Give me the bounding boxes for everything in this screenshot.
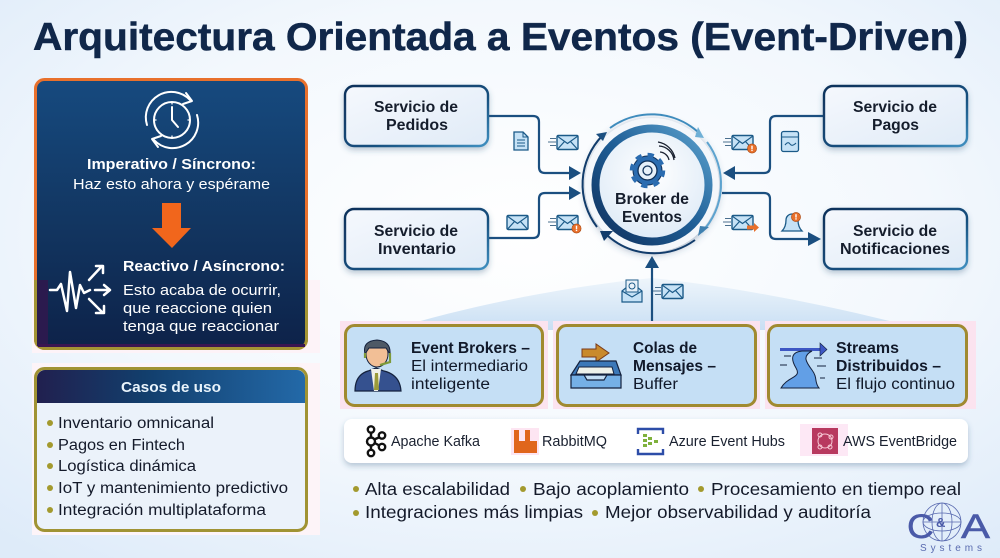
background wedge behind cards <box>390 278 925 330</box>
list: use cases: Integración multiplataforma <box>58 502 266 519</box>
logo: c&a systems: A <box>961 508 990 546</box>
panel: paradigm shift <box>32 80 320 353</box>
text: colas de mensajes <box>633 340 716 393</box>
label: broker de eventos: Eventos <box>622 209 682 226</box>
box: servicio de inventario: Inventario <box>378 241 456 258</box>
text: streams distribuidos <box>836 340 955 393</box>
icon: fast envelope bottom <box>653 284 683 298</box>
benefits list: Bajo acoplamiento <box>533 479 689 499</box>
logo: rabbitmq <box>511 428 607 455</box>
title: Arquitectura Orientada a Eventos (Event-Driven) <box>33 16 968 59</box>
logo: apache kafka <box>367 426 481 456</box>
text: reactivo description: tenga que reaccionar <box>123 318 279 335</box>
icon: pulse with arrows <box>50 266 110 313</box>
icon: envelope <box>507 216 528 230</box>
box: servicio de inventario: Servicio de <box>374 223 458 240</box>
logo: aws eventbridge <box>800 424 957 456</box>
box: servicio de pagos: Servicio de <box>853 99 937 116</box>
text: colas de mensajes: Mensajes – <box>633 358 716 375</box>
heading: imperativo: Imperativo / Síncrono: <box>87 156 256 173</box>
logo: c&a systems: & <box>936 515 945 530</box>
cycle arrows <box>583 114 721 253</box>
connector: pagos to broker <box>723 116 823 180</box>
heading: casos de uso: Casos de uso <box>121 379 221 396</box>
logo: c&a systems: Systems <box>920 543 982 554</box>
icon: envelope forward <box>723 216 759 232</box>
panel header <box>37 370 305 403</box>
box: servicio de notificaciones: Notificaciones <box>840 241 950 258</box>
benefits list: Mejor observabilidad y auditoría <box>605 502 871 522</box>
icon: payment receipt <box>782 132 798 152</box>
logo: c&a systems <box>907 503 990 554</box>
box: servicio de inventario <box>345 209 488 269</box>
icon: bell <box>782 212 802 231</box>
text: event brokers: El intermediario <box>411 358 528 375</box>
text: event brokers <box>411 340 530 393</box>
logo: azure event hubs <box>638 429 785 454</box>
icon: envelope alert <box>548 216 581 233</box>
arrow: orange down <box>152 203 191 248</box>
benefits list: Procesamiento en tiempo real <box>711 479 961 499</box>
list: use cases: IoT y mantenimiento predictivo <box>58 480 288 497</box>
text: streams distribuidos: El flujo continuo <box>836 376 955 393</box>
broker hub <box>583 114 721 253</box>
icon: stream river <box>780 343 827 388</box>
box: servicio de pedidos: Servicio de <box>374 99 458 116</box>
icon: inbox tray <box>571 344 621 388</box>
box: servicio de pagos <box>824 86 967 146</box>
text: reactivo description <box>123 282 281 335</box>
benefits list: Alta escalabilidad <box>365 479 510 499</box>
card: event brokers <box>340 321 548 409</box>
card: colas de mensajes <box>553 321 760 409</box>
text: reactivo description: Esto acaba de ocurrir, <box>123 282 281 299</box>
list: use cases: Pagos en Fintech <box>58 437 185 454</box>
box: servicio de notificaciones: Servicio de <box>853 223 937 240</box>
technology logo bar <box>344 419 968 463</box>
logo: aws eventbridge: AWS EventBridge <box>843 434 957 450</box>
box: servicio de pedidos: Pedidos <box>386 117 448 134</box>
connector: broker to notificaciones <box>722 193 821 246</box>
text: streams distribuidos: Streams <box>836 340 899 357</box>
box: servicio de notificaciones <box>824 209 967 269</box>
connector: inventario to broker <box>489 186 581 238</box>
icon: clock with cycle arrows <box>146 92 198 148</box>
connector: cards to broker <box>645 256 659 325</box>
logo: azure event hubs: Azure Event Hubs <box>669 434 785 450</box>
icon: envelope alert right <box>723 136 757 153</box>
card: streams distribuidos <box>765 321 976 409</box>
list: use cases <box>47 415 288 519</box>
text: streams distribuidos: Distribuidos – <box>836 358 941 375</box>
icon: email at sign <box>622 280 642 302</box>
panel: casos de uso <box>32 363 320 535</box>
box: servicio de pagos: Pagos <box>872 117 919 134</box>
text: colas de mensajes: Colas de <box>633 340 697 357</box>
label: broker de eventos <box>615 191 689 226</box>
logo: apache kafka: Apache Kafka <box>391 434 481 450</box>
icon: document <box>514 132 528 150</box>
text: event brokers: inteligente <box>411 376 490 393</box>
logo: c&a systems: C <box>907 508 934 546</box>
connector: pedidos to broker <box>489 116 581 180</box>
icon: gear with signal <box>632 142 675 186</box>
icon: fast envelope <box>548 136 578 150</box>
text: reactivo description: que reaccione quien <box>123 300 272 317</box>
benefits list: Integraciones más limpias <box>365 502 583 522</box>
text: colas de mensajes: Buffer <box>633 376 678 393</box>
logo: rabbitmq: RabbitMQ <box>542 434 607 450</box>
list: use cases: Logística dinámica <box>58 458 196 475</box>
icon: agent with headset <box>355 340 401 391</box>
benefits list <box>353 479 961 522</box>
text: event brokers: Event Brokers – <box>411 340 530 357</box>
list: use cases: Inventario omnicanal <box>58 415 214 432</box>
text: imperativo description: Haz esto ahora y espérame <box>73 176 270 193</box>
label: broker de eventos: Broker de <box>615 191 689 208</box>
heading: reactivo: Reactivo / Asíncrono: <box>123 258 285 275</box>
box: servicio de pedidos <box>345 86 488 146</box>
